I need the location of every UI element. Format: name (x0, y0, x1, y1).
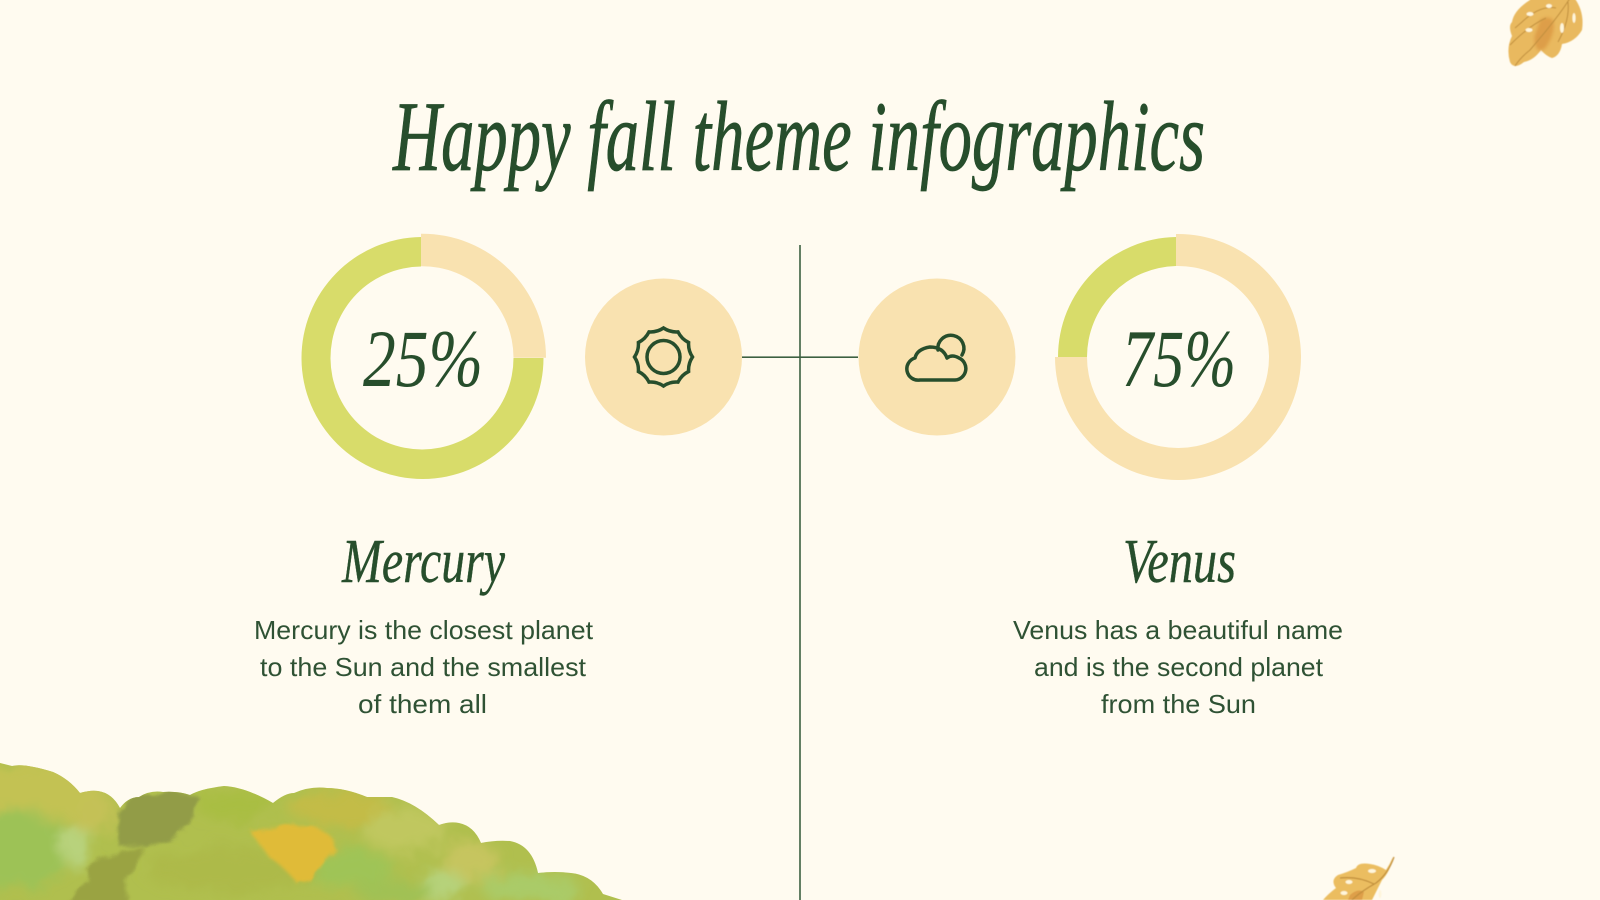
text block: Mercury description: Mercury is the closest planet (254, 615, 594, 645)
text block: Venus description: and is the second planet (1034, 652, 1324, 682)
text block: Venus description: from the Sun (1101, 689, 1256, 719)
text block: Mercury description: of them all (358, 689, 487, 719)
icon: leaf top right (1508, 0, 1583, 66)
text block: Mercury description (254, 615, 594, 719)
title: Happy fall theme infographics (392, 81, 1205, 192)
heading: Mercury: Mercury (341, 528, 505, 596)
donut chart: 75% (1055, 234, 1301, 480)
vertical divider line (799, 245, 801, 900)
horizontal connector line (742, 356, 858, 358)
donut chart: 25%: 25% (363, 313, 483, 404)
icon: leaf bottom (1323, 857, 1394, 900)
watercolor bush illustration (0, 750, 630, 900)
donut chart: 75%: 75% (1122, 313, 1236, 404)
icon: cloud (858, 278, 1016, 436)
donut chart: 25% (301, 234, 546, 479)
panel: Mercury (254, 234, 742, 719)
text block: Mercury description: to the Sun and the smallest (260, 652, 587, 682)
text block: Venus description: Venus has a beautiful name (1013, 615, 1343, 645)
text block: Venus description (1013, 615, 1343, 719)
heading: Venus: Venus (1123, 528, 1236, 596)
icon: sun (585, 278, 742, 436)
panel: Venus (858, 234, 1343, 719)
